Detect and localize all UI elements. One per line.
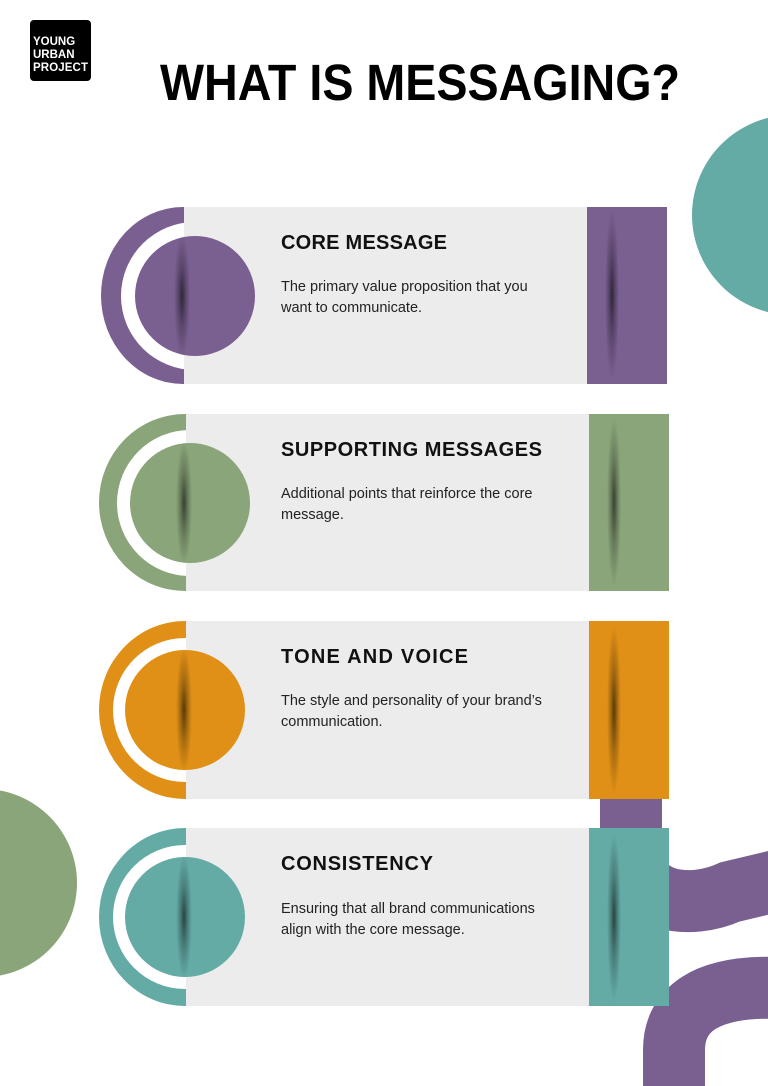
heading: CONSISTENCY [281, 853, 434, 875]
card: supporting messages [99, 414, 669, 591]
decorative teal circle top right [692, 115, 768, 315]
body text: communication. [281, 714, 383, 730]
body text: align with the core message. [281, 922, 465, 938]
body text: Additional points that reinforce the core [281, 486, 532, 502]
heading: SUPPORTING MESSAGES [281, 439, 542, 461]
logo: URBAN [33, 49, 75, 61]
logo: PROJECT [33, 62, 88, 74]
card: consistency [99, 828, 669, 1006]
logo: YOUNG [33, 36, 75, 48]
body text: message. [281, 507, 344, 523]
logo [30, 20, 91, 81]
decorative purple squiggle [631, 780, 768, 1086]
body text: The style and personality of your brand’s [281, 693, 542, 709]
body text: want to communicate. [280, 300, 422, 316]
heading: CORE MESSAGE [281, 232, 447, 254]
title: WHAT IS MESSAGING? [160, 54, 680, 111]
body text: Ensuring that all brand communications [281, 901, 535, 917]
heading: TONE AND VOICE [281, 646, 468, 668]
decorative green circle left [0, 789, 77, 977]
card: core message [101, 207, 667, 384]
card: tone and voice [99, 621, 669, 799]
body text: The primary value proposition that you [281, 279, 528, 295]
